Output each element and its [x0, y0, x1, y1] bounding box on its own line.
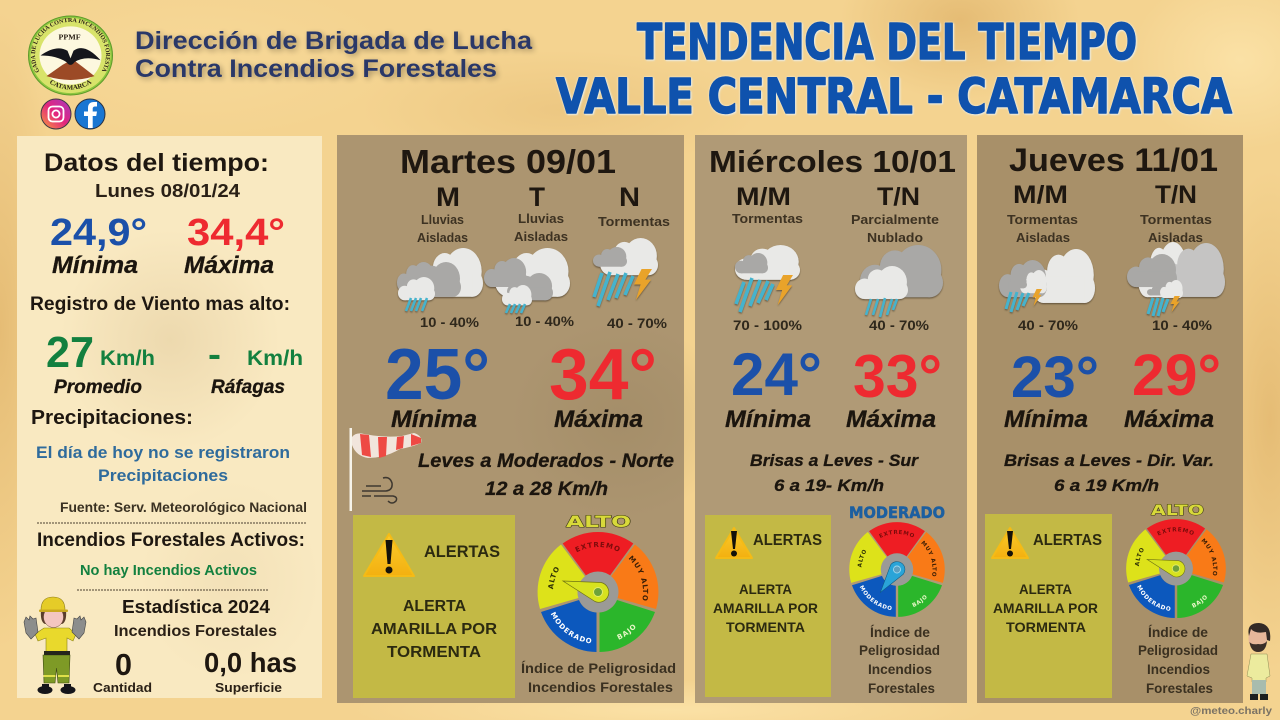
alert text: ALERTA	[1019, 581, 1072, 597]
forecast descriptions: Lluvias	[421, 212, 464, 227]
gauge: fire danger: EXTREMO	[879, 530, 914, 538]
header organisation name: Dirección de Brigada de Lucha	[135, 27, 533, 55]
period m: M	[436, 182, 460, 212]
icon: meteorologist character	[1247, 623, 1270, 700]
forecast descriptions: Tormentas	[1140, 212, 1212, 227]
minima label: Mínima	[725, 406, 811, 433]
maximum temperature: 33°	[853, 343, 942, 410]
icon: warning triangle	[716, 528, 752, 558]
forecast descriptions: Parcialmente	[851, 212, 939, 227]
forecast descriptions	[732, 211, 939, 245]
gauge: fire danger: ALTO	[858, 550, 866, 568]
date: Lunes 08/01/24	[95, 181, 240, 201]
period m: T	[529, 182, 545, 212]
period labels: T/N	[1155, 181, 1197, 209]
icon: warning triangle	[364, 534, 414, 576]
maximum: 34,4°	[187, 212, 285, 254]
header logo: brigada	[28, 16, 113, 96]
gauge: fire danger: BAJO	[616, 624, 636, 640]
minimum: 24,9°	[50, 212, 147, 254]
header organisation name	[135, 27, 533, 83]
gauge: fire danger: ALTO	[548, 567, 559, 590]
alert box	[353, 515, 515, 698]
forecast descriptions: Tormentas	[732, 211, 803, 226]
alert text: AMARILLA POR	[371, 621, 497, 638]
panel: martes 09/01	[337, 135, 695, 703]
gauge: fire danger: ALTO	[1134, 548, 1144, 566]
gust unit: Km/h	[247, 347, 303, 370]
rain probabilities	[420, 313, 668, 331]
icon: instagram	[41, 99, 71, 129]
day heading: Miércoles 10/01	[709, 144, 956, 179]
alert text: ALERTAS	[753, 532, 822, 549]
icon: facebook	[75, 99, 105, 129]
gauge: fire danger	[849, 522, 945, 617]
burned area: 0,0 has	[204, 647, 297, 678]
area label: Superficie	[215, 680, 282, 695]
gauge caption	[521, 660, 676, 695]
icon: firefighter	[24, 597, 86, 694]
icon: rain clouds morning	[397, 248, 483, 311]
logo mountain	[46, 59, 94, 80]
maximum temperature: 34°	[549, 335, 657, 415]
maximum temperature: 29°	[1132, 343, 1221, 408]
icon: wind	[362, 478, 397, 503]
period labels: M/M	[1013, 181, 1068, 209]
rain probabilities: 40 - 70%	[1018, 317, 1079, 333]
icon: isolated storm morning	[999, 249, 1095, 312]
gauge caption: Incendios Forestales	[528, 679, 673, 695]
minimum temperature: 23°	[1011, 345, 1099, 410]
wind forecast: 6 a 19 Km/h	[1054, 476, 1159, 495]
gauge: fire danger: MODERADO	[550, 612, 592, 644]
alert text: AMARILLA POR	[993, 600, 1098, 616]
wind gust: -	[208, 336, 221, 374]
active fires heading: Incendios Forestales Activos:	[37, 530, 305, 551]
source: Fuente: Serv. Meteorológico Nacional	[60, 500, 307, 515]
gauge caption: Índice de	[870, 624, 930, 640]
rain probabilities: 10 - 40%	[515, 313, 575, 329]
rafagas: Ráfagas	[211, 377, 285, 398]
header organisation name: Contra Incendios Forestales	[135, 55, 497, 83]
wind forecast	[1004, 451, 1214, 495]
gauge caption	[859, 624, 940, 696]
rain probabilities: 10 - 40%	[1152, 317, 1213, 333]
day heading: Jueves 11/01	[1009, 142, 1218, 178]
alert text: TORMENTA	[387, 644, 481, 661]
wind unit: Km/h	[100, 347, 155, 370]
gauge caption: Forestales	[1146, 680, 1213, 696]
danger level: ALTO	[566, 512, 631, 531]
maxima label: Máxima	[846, 406, 936, 433]
alert box	[985, 514, 1112, 698]
gauge caption: Índice de	[1148, 624, 1208, 640]
logo arc text: BRIGADA DE LUCHA CONTRA INCENDIOS FORESTALES	[31, 18, 110, 72]
maxima label: Máxima	[1124, 406, 1214, 433]
icon: rain clouds afternoon	[484, 248, 570, 313]
forecast descriptions: Aisladas	[1016, 230, 1070, 245]
heading: Datos del tiempo:	[44, 149, 269, 177]
gauge: fire danger: BAJO	[1192, 595, 1207, 608]
rain probabilities	[733, 317, 930, 333]
forecast descriptions: Aisladas	[1148, 230, 1203, 245]
rain probabilities: 10 - 40%	[420, 314, 480, 330]
rain probabilities: 70 - 100%	[733, 317, 803, 333]
minimum temperature: 24°	[731, 341, 822, 408]
count label: Cantidad	[93, 680, 152, 695]
promedio: Promedio	[54, 377, 142, 398]
gauge caption: Forestales	[868, 680, 935, 696]
icon: storm night	[593, 238, 658, 306]
minima label: Mínima	[391, 406, 477, 433]
panel: miercoles 10/01	[695, 135, 967, 703]
icon: partly cloudy	[855, 245, 943, 317]
day heading: Martes 09/01	[400, 143, 616, 180]
minimum temperature: 25°	[385, 335, 490, 415]
alert box	[705, 515, 831, 697]
period labels	[1013, 181, 1197, 209]
logo lower text: CATAMARCA	[50, 80, 92, 90]
forecast descriptions: Tormentas	[598, 214, 670, 229]
logo ppmf: PPMF	[58, 33, 81, 41]
forecast descriptions: Nublado	[867, 230, 923, 245]
alert text	[371, 542, 500, 661]
active fires text: No hay Incendios Activos	[80, 563, 257, 579]
icon: isolated storm night	[1127, 242, 1225, 316]
alert text	[993, 532, 1102, 635]
icon: warning triangle	[992, 528, 1028, 558]
wind forecast: Brisas a Leves - Sur	[750, 451, 919, 470]
minima label: Mínima	[52, 252, 138, 279]
danger level: MODERADO	[849, 503, 945, 522]
alert text: ALERTA	[739, 581, 792, 597]
alert text: ALERTAS	[424, 542, 500, 561]
wind forecast: 12 a 28 Km/h	[485, 479, 608, 500]
gauge caption	[1138, 624, 1218, 696]
danger level: ALTO	[1151, 503, 1204, 519]
wind heading: Registro de Viento mas alto:	[30, 294, 290, 315]
alert text: TORMENTA	[1006, 619, 1086, 635]
alert text: ALERTAS	[1033, 532, 1102, 549]
gauge: fire danger: MODERADO	[1137, 584, 1170, 611]
precipitation heading: Precipitaciones:	[31, 407, 193, 429]
gauge caption: Índice de Peligrosidad	[521, 660, 676, 676]
rain probabilities: 40 - 70%	[869, 317, 930, 333]
alert text: ALERTA	[403, 598, 466, 615]
forecast descriptions: Lluvias	[518, 211, 564, 226]
rain probabilities	[1018, 317, 1213, 333]
period m: N	[619, 182, 640, 212]
gauge: fire danger: BAJO	[912, 595, 926, 607]
wind forecast	[750, 451, 919, 495]
period labels: M/M	[736, 183, 791, 211]
forecast descriptions: Aisladas	[514, 229, 568, 244]
maxima label: Máxima	[184, 252, 274, 279]
precipitation text	[36, 443, 290, 485]
period labels	[736, 183, 920, 211]
wind forecast: 6 a 19- Km/h	[774, 476, 884, 495]
stats heading: Estadística 2024	[122, 597, 270, 617]
forecast descriptions: Tormentas	[1007, 212, 1078, 227]
wind average: 27	[46, 328, 94, 377]
panel: datos del tiempo	[17, 136, 322, 698]
forecast descriptions: Aisladas	[417, 230, 468, 245]
precipitation text: El día de hoy no se registraron	[36, 443, 290, 462]
maxima label: Máxima	[554, 406, 643, 433]
fire count: 0	[115, 647, 132, 682]
minima label: Mínima	[1004, 406, 1088, 433]
gauge caption: Incendios	[868, 661, 932, 677]
gauge: fire danger	[1126, 519, 1226, 618]
period m	[436, 182, 640, 212]
icon: windsock	[350, 428, 421, 511]
icon: storm	[735, 245, 800, 312]
panel: jueves 11/01	[977, 135, 1243, 703]
gauge: fire danger: MUY ALTO	[921, 540, 937, 576]
gauge caption: Peligrosidad	[859, 642, 940, 658]
rain probabilities: 40 - 70%	[607, 315, 668, 331]
forecast descriptions	[1007, 212, 1212, 245]
alert text: TORMENTA	[726, 619, 805, 635]
alert text: AMARILLA POR	[713, 600, 818, 616]
logo condor	[40, 48, 100, 65]
precipitation text: Precipitaciones	[98, 466, 228, 485]
gauge: fire danger	[538, 532, 658, 652]
gauge: fire danger: EXTREMO	[1157, 527, 1194, 536]
alert text	[713, 532, 822, 635]
forecast descriptions	[417, 211, 670, 245]
wind forecast: Brisas a Leves - Dir. Var.	[1004, 451, 1214, 470]
gauge caption: Incendios	[1147, 661, 1210, 677]
gauge: fire danger: MUY ALTO	[1201, 538, 1218, 576]
stats subheading: Incendios Forestales	[114, 623, 277, 640]
title	[556, 14, 1232, 125]
gauge: fire danger: EXTREMO	[575, 542, 620, 552]
period labels: T/N	[877, 183, 920, 211]
wind forecast: Leves a Moderados - Norte	[418, 451, 674, 472]
gauge: fire danger: MUY ALTO	[628, 555, 648, 600]
gauge: fire danger: MODERADO	[860, 585, 892, 610]
gauge caption: Peligrosidad	[1138, 642, 1218, 658]
wind forecast	[418, 451, 674, 500]
credit: @meteo.charly	[1190, 705, 1272, 717]
